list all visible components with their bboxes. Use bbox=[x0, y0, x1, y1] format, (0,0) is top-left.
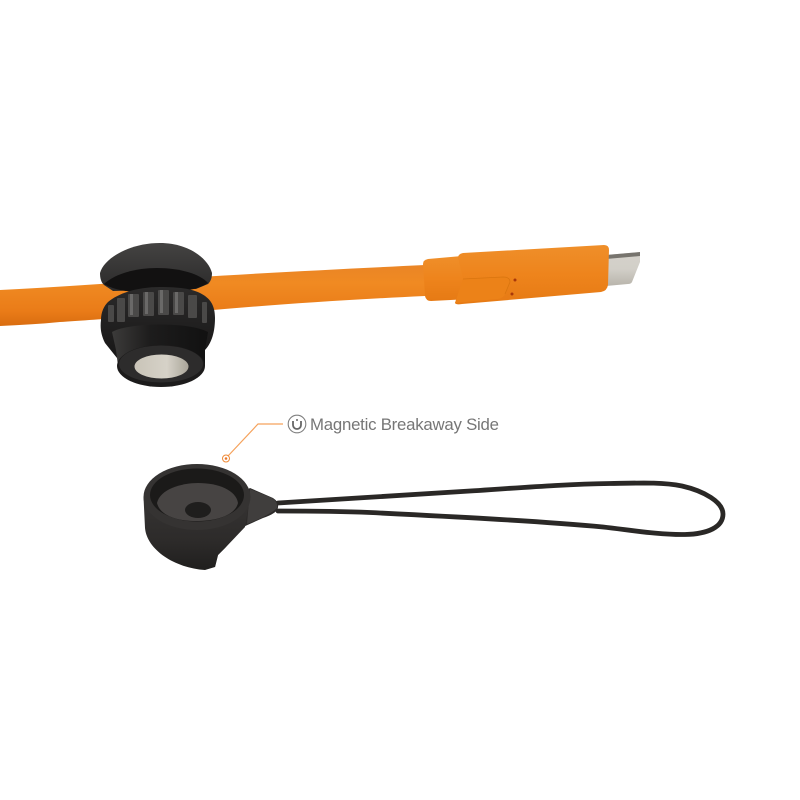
connector collar bbox=[423, 256, 470, 301]
center button bbox=[185, 502, 211, 518]
clip body bbox=[144, 497, 250, 570]
tether clip bbox=[144, 464, 278, 570]
icon: magnet bbox=[288, 415, 306, 433]
target dot bbox=[222, 455, 230, 462]
leader line bbox=[228, 424, 283, 456]
recessed floor bbox=[157, 483, 238, 521]
cable anchor: knurled ring bbox=[101, 287, 215, 358]
connector flap bbox=[455, 277, 510, 303]
usb-c connector bbox=[423, 245, 640, 304]
metal plug tip bbox=[606, 252, 640, 286]
connector housing bbox=[455, 245, 609, 304]
cable bbox=[0, 265, 425, 326]
magnet face bbox=[134, 354, 188, 378]
cable anchor: magnet cap bbox=[112, 324, 208, 387]
clip rim bbox=[144, 464, 250, 530]
callout bbox=[222, 415, 499, 462]
indicator dots bbox=[514, 278, 516, 282]
cable anchor: top disc bbox=[100, 243, 212, 293]
label text: Magnetic Breakaway Side bbox=[310, 415, 499, 434]
clip tab bbox=[190, 488, 278, 567]
lanyard cord bbox=[278, 483, 723, 535]
